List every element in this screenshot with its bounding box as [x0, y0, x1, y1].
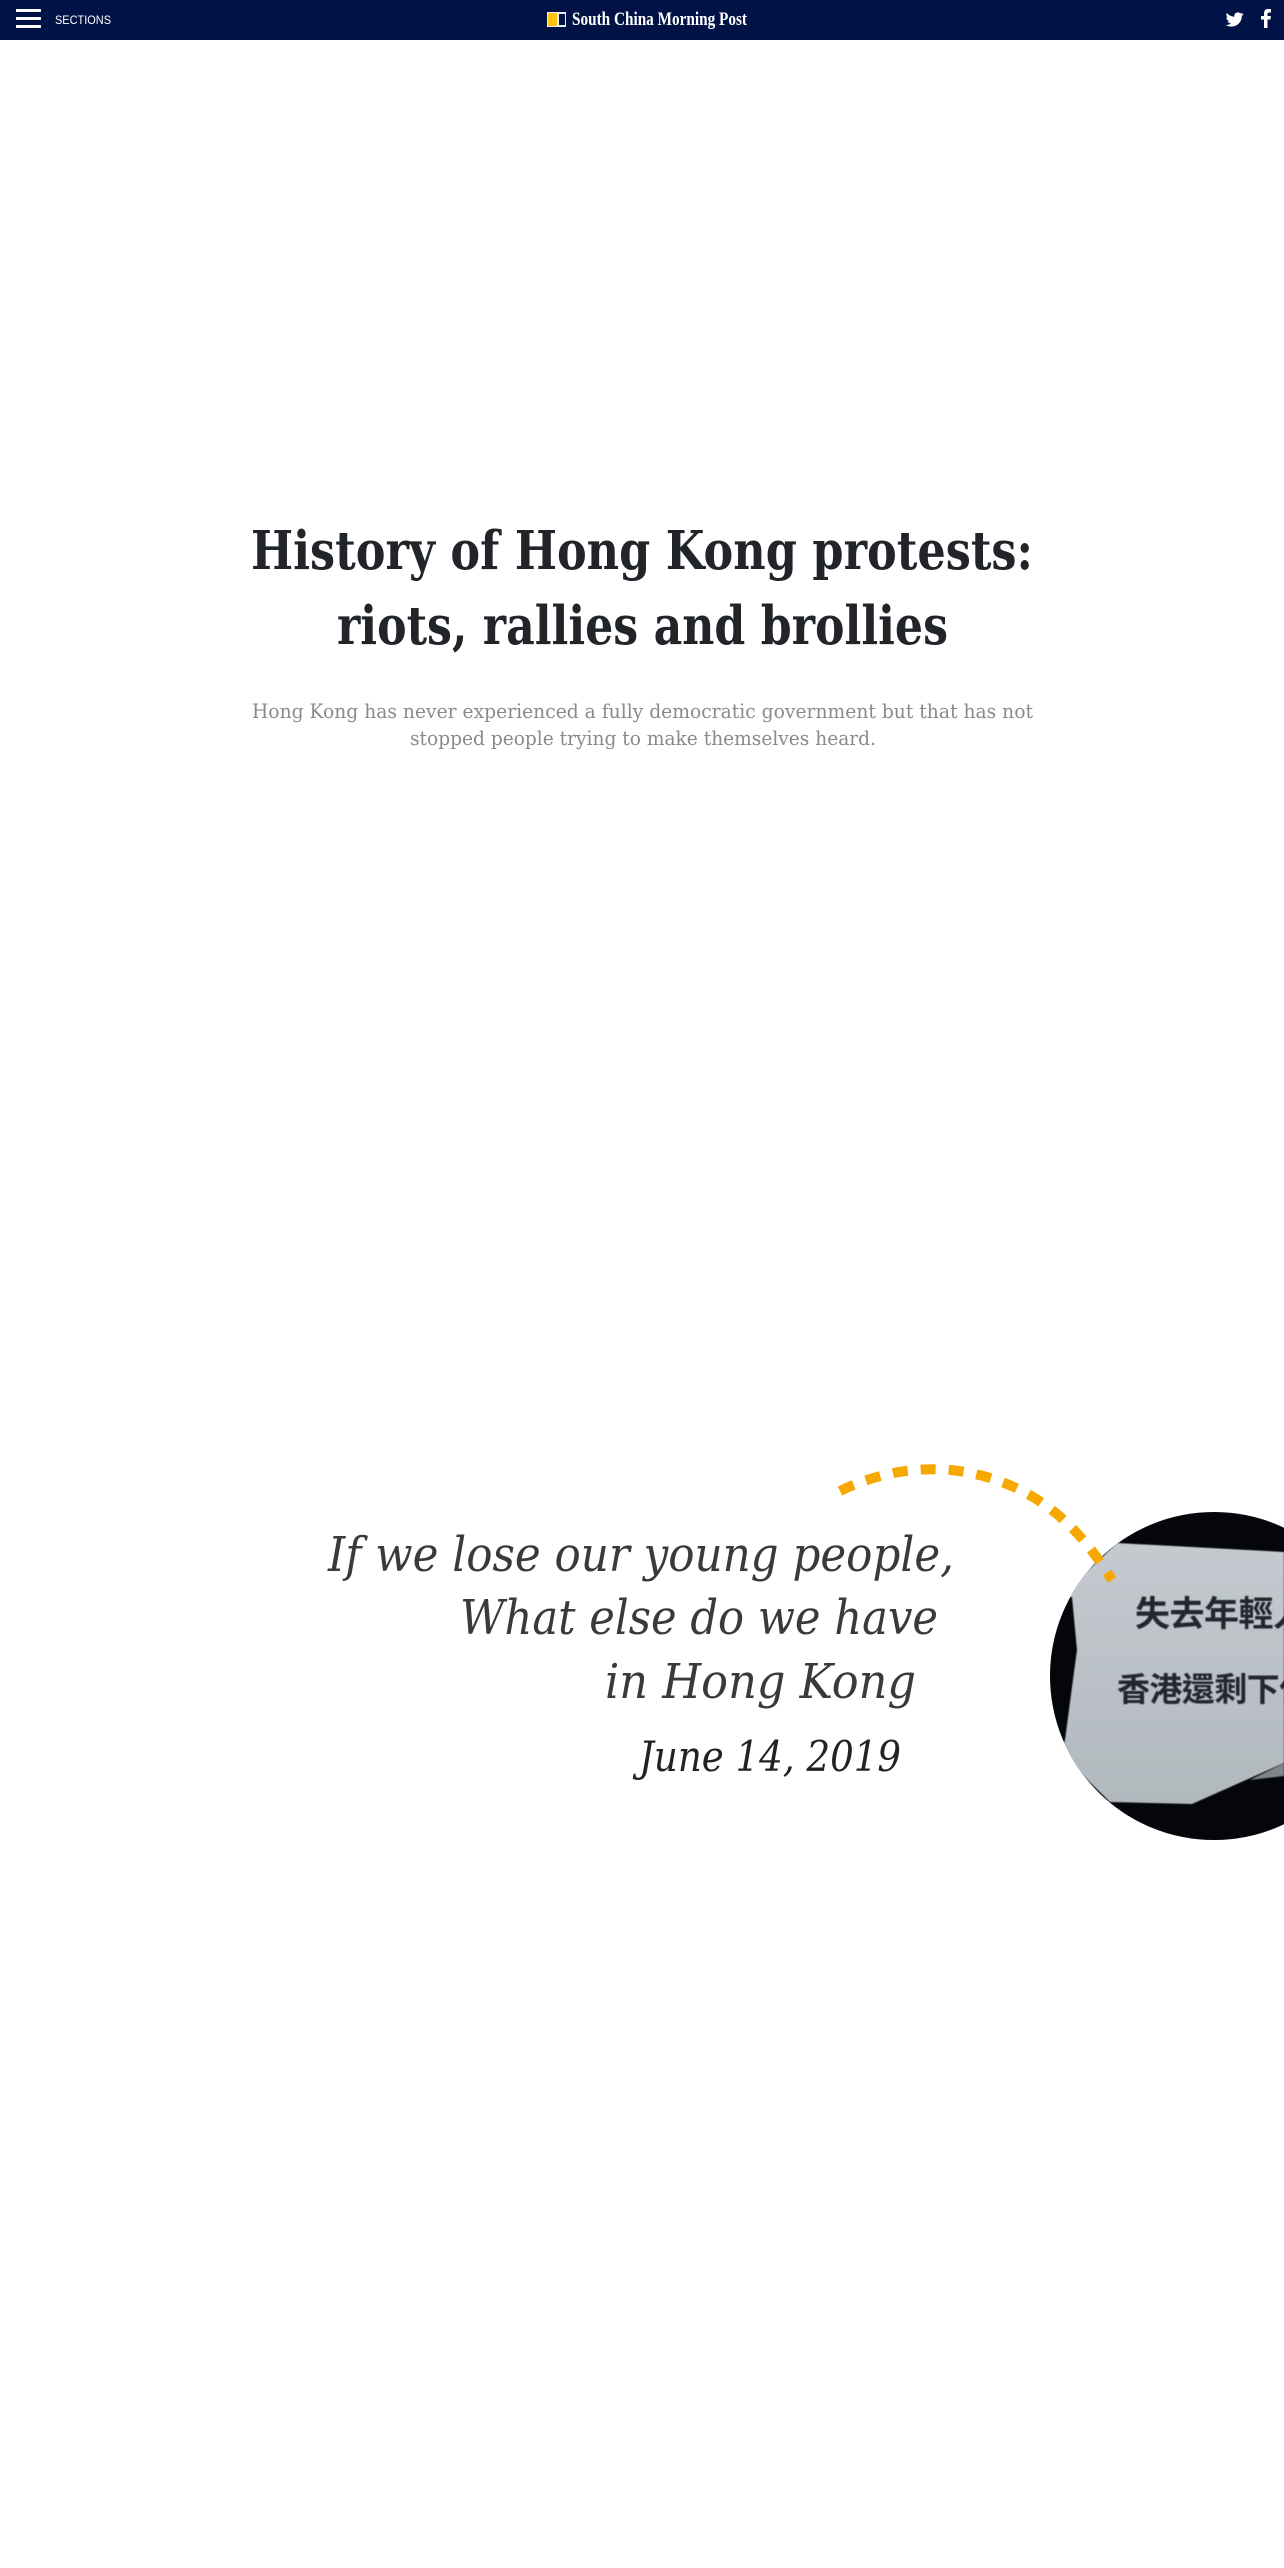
- quote date: June 14, 2019: [632, 1732, 901, 1781]
- subtitle: [252, 699, 1033, 750]
- icon: twitter: [1226, 12, 1244, 27]
- quote text: If we lose our young people,: [327, 1527, 954, 1583]
- navigation bar: [0, 0, 1284, 40]
- photo: protest placard in circle: [1050, 1512, 1284, 1840]
- sections label: SECTIONS: [55, 13, 111, 27]
- infographic page: [0, 0, 1284, 1840]
- subtitle: stopped people trying to make themselves heard.: [410, 726, 876, 750]
- placard paper: [1060, 1543, 1284, 1804]
- title: [251, 520, 1033, 657]
- placard shadow wedge: [1250, 1763, 1284, 1780]
- placard text: [1117, 1595, 1284, 1708]
- icon: hamburger menu: [16, 9, 41, 28]
- title: History of Hong Kong protests:: [251, 520, 1033, 582]
- quote text: What else do we have: [460, 1590, 938, 1646]
- subtitle: Hong Kong has never experienced a fully democratic government but that has not: [252, 699, 1033, 723]
- dashed arrow arc: [840, 1469, 1112, 1580]
- icon: facebook: [1261, 9, 1271, 28]
- title: riots, rallies and brollies: [337, 595, 948, 657]
- quote text: [327, 1527, 954, 1710]
- quote text: in Hong Kong: [605, 1654, 916, 1710]
- logo: South China Morning Post: South China Morning Post: [572, 9, 748, 30]
